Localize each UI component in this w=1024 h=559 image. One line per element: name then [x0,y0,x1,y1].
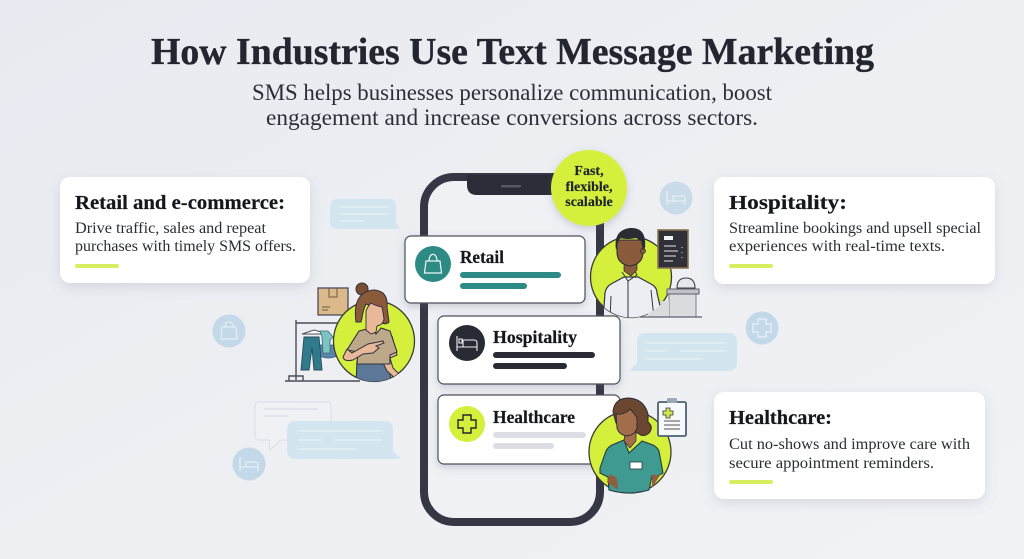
card: healthcare: Healthcare: [729,407,832,429]
menu board [658,230,688,268]
panel: hospitality: Hospitality [493,327,577,347]
panel: hospitality [438,316,620,384]
panel: healthcare [438,395,620,464]
figure: hospitality worker with menu and bell [590,228,702,322]
neck and head [624,262,637,276]
card: healthcare: Cut no-shows and improve care with [729,436,970,453]
icon: cross [449,406,485,442]
box [318,288,348,315]
card: hospitality: experiences with real-time texts. [729,238,945,255]
chat bubble: outline [255,402,331,450]
chat bubble: filled bottom [287,421,401,459]
title: How Industries Use Text Message Marketing [151,31,874,73]
scrubs [600,440,663,493]
panel: healthcare: Healthcare [493,407,575,427]
lime circle [590,236,672,318]
card: retail and e-commerce: purchases with timely SMS offers. [75,238,296,255]
card: hospitality [714,177,995,284]
card: healthcare [714,392,985,499]
subtitle: SMS helps businesses personalize communication, boost [252,80,772,106]
ghost icon: bed top [660,182,692,214]
card: retail and e-commerce: Drive traffic, sales and repeat [75,220,267,237]
subtitle [252,80,772,131]
card: hospitality: Streamline bookings and upsell special [729,220,981,237]
chat bubble: right [629,333,737,371]
card: retail and e-commerce [60,177,310,283]
figure: retail worker with clothing rack [285,283,414,384]
lime circle [589,411,671,493]
clothing rack [285,320,360,381]
head [355,283,389,334]
panel: retail: Retail [460,247,504,267]
arm [343,341,384,361]
panel: retail [405,236,585,303]
badge: fast flexible scalable: scalable [565,195,613,210]
card: hospitality: Hospitality: [729,192,847,214]
badge: fast flexible scalable [551,150,627,226]
phone notch [467,175,555,195]
ghost icon: bed bottom [232,448,266,480]
badge: fast flexible scalable: Fast, [574,164,604,179]
ghost icon: shopping bag [212,314,246,348]
figure: healthcare worker with clipboard [589,398,686,493]
card: retail and e-commerce: Retail and e-commerce: [75,192,285,214]
badge: fast flexible scalable: flexible, [565,180,613,195]
subtitle: engagement and increase conversions across sectors. [266,105,758,131]
reception desk [640,278,702,317]
phone [424,175,600,522]
hair and head [613,398,651,436]
card: healthcare: secure appointment reminders. [729,455,934,472]
icon: bed [449,325,485,361]
clipboard [658,398,686,436]
chat bubble: upper left [330,199,400,229]
icon: bag [415,246,451,282]
ghost icon: plus [746,312,778,344]
lime circle [334,300,414,382]
shirt [604,276,660,318]
